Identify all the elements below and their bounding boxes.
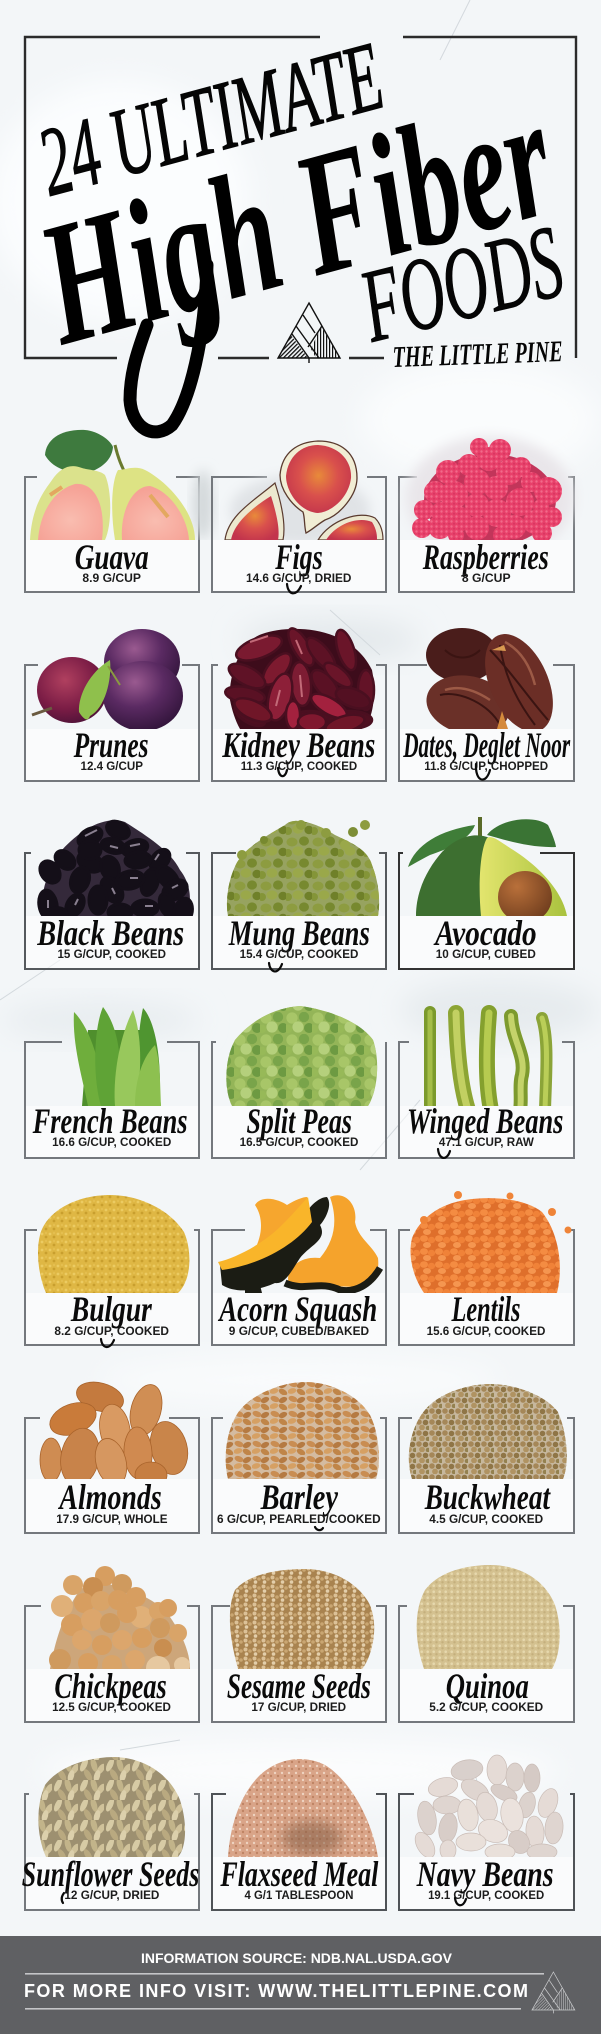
amount: 15.4 G/CUP, COOKED [240, 949, 358, 961]
card: Kidney Beans [212, 625, 386, 781]
name: Lentils [451, 1289, 520, 1329]
image: split peas [226, 1006, 377, 1106]
name: Flaxseed Meal [220, 1854, 378, 1894]
name: French Beans [32, 1101, 188, 1141]
amount: 19.1 G/CUP, COOKED [428, 1890, 544, 1902]
image: sesame seeds [230, 1569, 374, 1669]
card: Chickpeas [25, 1566, 199, 1722]
image: quinoa [417, 1565, 560, 1669]
image: guava [30, 430, 213, 540]
title frame [25, 37, 576, 358]
card: Dates, Deglet Noor [399, 624, 574, 781]
card: Buckwheat [399, 1384, 574, 1533]
card: Sesame Seeds [212, 1569, 386, 1722]
footer rule top [25, 1973, 544, 1975]
card: Acorn Squash [212, 1195, 386, 1345]
image: raspberries [398, 434, 575, 540]
card: Guava [25, 430, 213, 592]
amount: 4.5 G/CUP, COOKED [429, 1514, 543, 1526]
card: Winged Beans [399, 1012, 574, 1158]
name: Split Peas [246, 1101, 352, 1141]
image: flaxseed meal [228, 1759, 378, 1857]
amount: 12.4 G/CUP [80, 761, 143, 773]
card: Figs [212, 441, 386, 593]
card: Barley [212, 1382, 386, 1533]
card: Flaxseed Meal [212, 1759, 386, 1910]
amount: 5.2 G/CUP, COOKED [429, 1702, 543, 1714]
image: kidney beans [224, 625, 374, 737]
amount: 10 G/CUP, CUBED [436, 949, 536, 961]
logo: mountain pine [278, 303, 340, 363]
card: Lentils [399, 1191, 574, 1345]
amount: 6 G/CUP, PEARLED/COOKED [217, 1514, 381, 1526]
card: Prunes [25, 629, 199, 781]
footer rule bottom [25, 2008, 521, 2010]
card: Almonds [25, 1377, 199, 1533]
name: Avocado [433, 913, 537, 953]
card: Avocado [399, 817, 574, 969]
image: winged beans [430, 1012, 546, 1110]
information source: INFORMATION SOURCE: NDB.NAL.USDA.GOV [141, 1951, 452, 1966]
image: sunflower seeds [38, 1757, 185, 1857]
name: Buckwheat [424, 1477, 551, 1517]
amount: 16.6 G/CUP, COOKED [52, 1137, 171, 1149]
card: Black Beans [25, 818, 199, 969]
name: Sunflower Seeds [22, 1854, 199, 1894]
name: Navy Beans [416, 1854, 554, 1894]
name: Bulgur [70, 1289, 153, 1329]
amount: 11.3 G/CUP, COOKED [241, 761, 357, 773]
image: lentils [410, 1191, 572, 1293]
amount: 14.6 G/CUP, DRIED [246, 573, 351, 585]
image: avocado [408, 817, 567, 923]
amount: 47.1 G/CUP, RAW [439, 1137, 534, 1149]
amount: 17.9 G/CUP, WHOLE [56, 1514, 168, 1526]
image: almonds [40, 1382, 188, 1479]
amount: 15 G/CUP, COOKED [58, 949, 166, 961]
name: Prunes [73, 725, 149, 765]
name: Mung Beans [228, 913, 370, 953]
amount: 11.8 G/CUP, CHOPPED [424, 761, 548, 773]
card: Mung Beans [212, 820, 386, 971]
image: navy beans [411, 1755, 564, 1861]
image: bulgur [38, 1195, 189, 1293]
name: Raspberries [422, 537, 549, 577]
name: Black Beans [36, 913, 184, 953]
amount: 8 G/CUP [462, 573, 511, 585]
name: Almonds [58, 1477, 162, 1517]
name: Barley [260, 1477, 339, 1517]
card: French Beans [25, 1007, 199, 1158]
name: Chickpeas [54, 1666, 167, 1706]
amount: 12 G/CUP, DRIED [64, 1890, 159, 1902]
name: Quinoa [446, 1666, 529, 1706]
card: Bulgur [25, 1195, 199, 1347]
card: Navy Beans [399, 1755, 574, 1910]
image: barley [226, 1382, 379, 1479]
image: black beans [37, 820, 194, 916]
amount: 8.2 G/CUP, COOKED [54, 1326, 169, 1338]
card: Split Peas [212, 1006, 386, 1158]
name: Sesame Seeds [227, 1666, 371, 1706]
card: Sunflower Seeds [22, 1757, 199, 1910]
name: Kidney Beans [222, 725, 375, 765]
amount: 16.5 G/CUP, COOKED [240, 1137, 358, 1149]
image: acorn squash [218, 1195, 380, 1293]
website line: FOR MORE INFO VISIT: WWW.THELITTLEPINE.COM [24, 1981, 528, 2001]
image: french beans [74, 1007, 161, 1106]
footer band [0, 1936, 601, 2034]
name: Figs [274, 537, 323, 577]
amount: 15.6 G/CUP, COOKED [427, 1326, 545, 1338]
card: Quinoa [399, 1565, 574, 1722]
amount: 17 G/CUP, DRIED [251, 1702, 346, 1714]
image: figs [225, 441, 383, 545]
amount: 12.5 G/CUP, COOKED [52, 1702, 171, 1714]
card: Raspberries [399, 436, 574, 592]
amount: 9 G/CUP, CUBED/BAKED [229, 1326, 369, 1338]
image: mung beans [227, 820, 379, 916]
name: Acorn Squash [218, 1289, 377, 1329]
amount: 4 G/1 TABLESPOON [244, 1890, 353, 1902]
amount: 8.9 G/CUP [82, 573, 141, 585]
image: buckwheat [409, 1384, 567, 1479]
image: dates [426, 628, 553, 729]
image: chickpeas [49, 1566, 190, 1680]
name: Guava [75, 537, 149, 577]
footer logo [532, 1972, 575, 2013]
image: prunes [32, 629, 183, 731]
